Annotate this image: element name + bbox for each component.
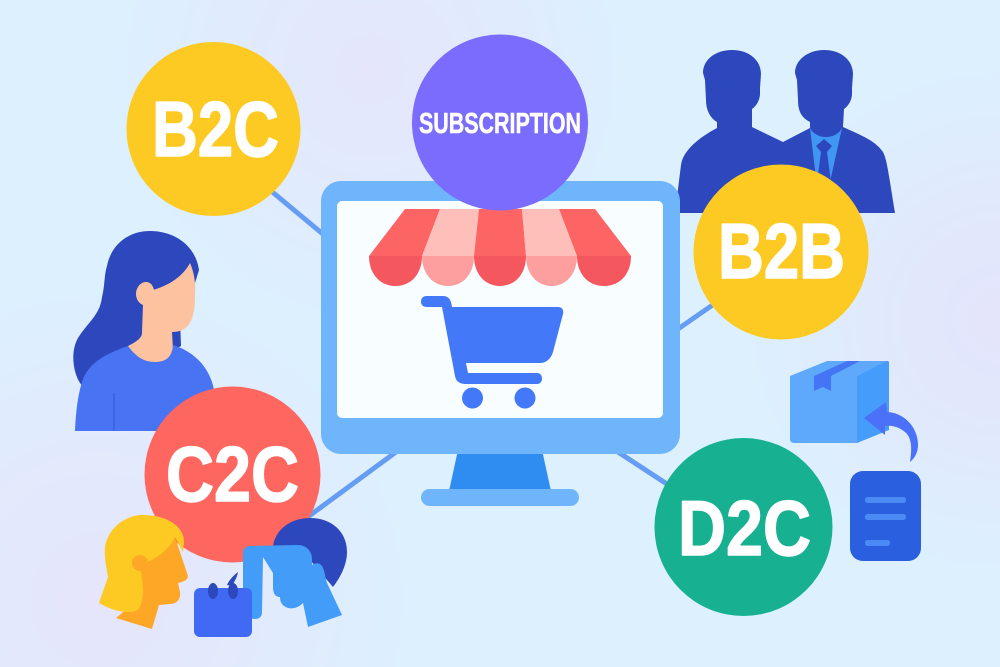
badge: B2C [126, 42, 300, 216]
icon: shopping bag [194, 572, 252, 637]
sweater [75, 345, 214, 431]
icon: parcel box [790, 361, 889, 443]
badge: C2C [144, 386, 320, 562]
icon: document [850, 471, 921, 561]
badge: B2B [694, 164, 868, 340]
face [243, 545, 342, 627]
back hair [273, 518, 347, 587]
hair [73, 231, 199, 395]
badge: B2B: B2B [718, 207, 845, 295]
box top and front [790, 361, 889, 443]
icon: return arrow [864, 402, 918, 462]
box side [857, 361, 889, 443]
tie [816, 139, 832, 182]
monitor screen [337, 201, 663, 418]
icon: shopping cart [421, 296, 563, 408]
monitor frame [321, 181, 680, 454]
monitor [321, 181, 680, 506]
ear [132, 555, 148, 571]
face [128, 263, 195, 366]
icon: business people [675, 50, 895, 213]
badge: SUBSCRIPTION [412, 34, 588, 210]
shirt collar [810, 128, 842, 182]
face [116, 537, 188, 629]
badge: C2C: C2C [166, 430, 299, 518]
icon: yellow profile head [99, 515, 188, 629]
icon: shop awning [369, 209, 631, 286]
badge: SUBSCRIPTION: SUBSCRIPTION [419, 108, 581, 140]
connector lines [270, 190, 714, 519]
hair [99, 515, 184, 612]
monitor stand [449, 450, 551, 491]
icon: woman customer [73, 231, 214, 431]
monitor base [421, 489, 579, 506]
ear [136, 282, 154, 306]
badge: D2C [654, 438, 832, 616]
bag handles [208, 572, 238, 599]
icon: blue profile head [243, 518, 347, 627]
badge: D2C: D2C [678, 484, 811, 572]
badge: B2C: B2C [152, 85, 279, 173]
neck [810, 106, 844, 137]
parcel tape [814, 361, 860, 391]
